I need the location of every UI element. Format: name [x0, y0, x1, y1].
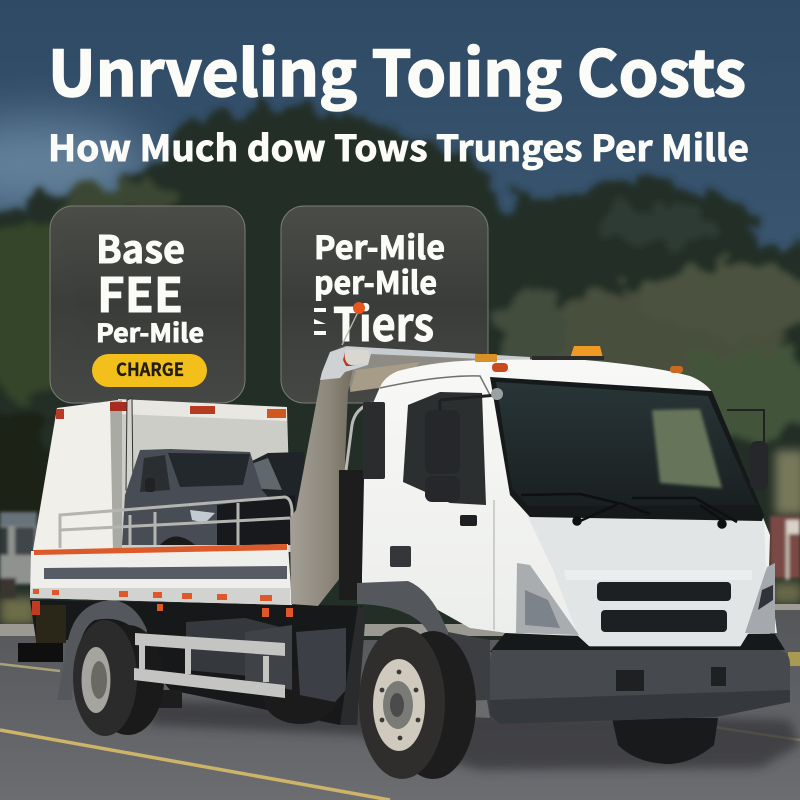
front panel — [527, 515, 767, 646]
wipers — [521, 494, 737, 528]
front left wheel — [359, 627, 476, 779]
windshield — [490, 377, 764, 521]
cab wheel arch and step — [340, 581, 490, 725]
icon: tier dashes — [314, 308, 326, 335]
tow truck — [18, 346, 790, 779]
rear cabin box — [33, 398, 291, 552]
badge: charge: CHARGE — [116, 356, 184, 382]
rear hitch — [18, 643, 63, 662]
rear wheel — [73, 620, 164, 736]
roof lights — [475, 346, 683, 373]
background building left — [0, 512, 800, 598]
side guard rails — [134, 633, 285, 698]
cab grab handle — [346, 403, 372, 470]
headlights — [516, 563, 775, 635]
roof vent — [363, 402, 385, 479]
label: per-mile: Per-Mile — [96, 314, 204, 350]
heading: per-mile lowercase: per-Mile — [314, 258, 437, 303]
panel: per-mile tiers — [281, 206, 488, 403]
title: Unrveling Toıing Costs — [48, 24, 746, 115]
bed railing — [60, 497, 292, 548]
door details — [390, 515, 477, 567]
rear fender and mudflap — [57, 600, 182, 708]
second rear wheel — [263, 670, 337, 724]
road markings — [0, 652, 800, 800]
heading: fee: FEE — [97, 257, 183, 326]
truck shadow — [150, 700, 800, 770]
towed car — [122, 449, 304, 545]
side window — [403, 392, 486, 505]
icon: antenna ball — [342, 302, 365, 345]
windshield reflection — [652, 409, 722, 488]
front right wheel — [612, 718, 718, 764]
heading: base: Base — [96, 219, 185, 274]
grille — [597, 582, 731, 632]
chassis — [30, 600, 362, 725]
subtitle: How Much dow Tows Trunges Per Mille — [48, 120, 749, 172]
chassis gap and wiring — [339, 470, 364, 600]
heading: per-mile: Per-Mile — [314, 223, 445, 269]
flatbed side — [30, 544, 293, 617]
roof trim — [380, 376, 490, 395]
badge: charge — [92, 354, 207, 387]
front bumper — [490, 633, 790, 724]
steel headboard — [290, 346, 530, 606]
bed reflectors — [32, 589, 293, 617]
panel: base fee — [50, 206, 245, 403]
heading: tiers: Tiers — [333, 289, 434, 355]
rear box lights — [56, 402, 286, 419]
fuel tanks — [186, 618, 346, 702]
road — [0, 604, 800, 800]
cab body — [362, 359, 777, 646]
door seam — [493, 500, 495, 630]
wheel lug holes — [380, 670, 420, 740]
mirrors — [425, 388, 768, 502]
